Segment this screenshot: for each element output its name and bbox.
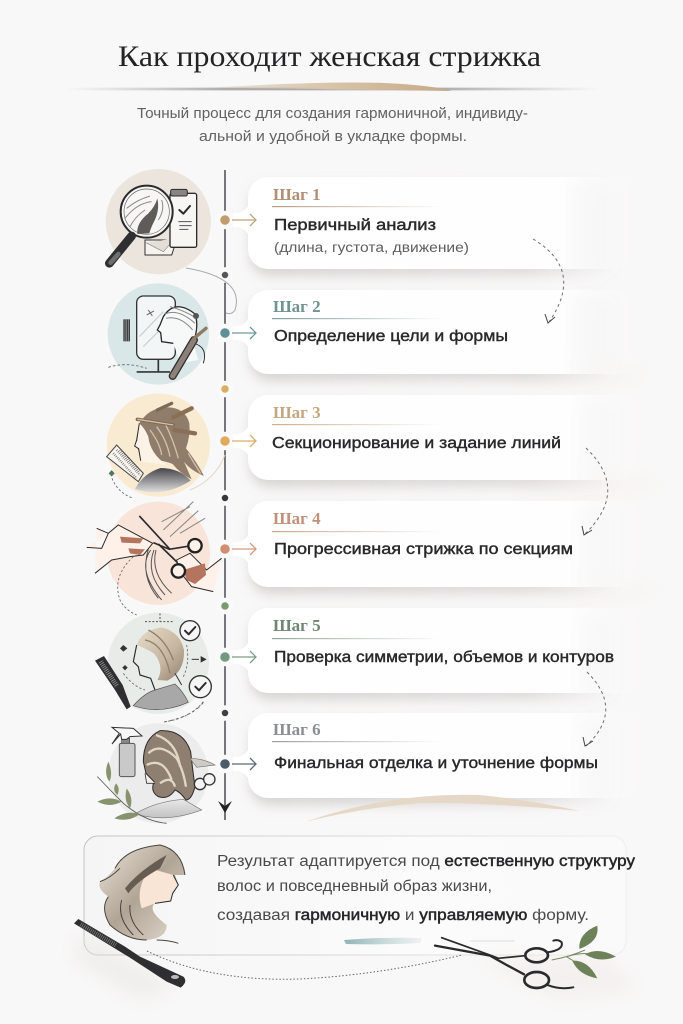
card 4: Прогрессивная стрижка по секциям	[274, 541, 573, 558]
card 3: Секционирование и задание линий	[272, 435, 561, 452]
card 3	[229, 395, 648, 480]
dashed connector arrows	[164, 239, 608, 746]
result text: Результат адаптируется под естественную структуру	[217, 853, 635, 870]
card 5: Проверка симметрии, объемов и контуров	[274, 649, 614, 666]
card 2: Шаг 2	[273, 297, 321, 316]
icon: woman with flowing hair	[99, 845, 185, 943]
subtitle: альной и удобной в укладке формы.	[199, 128, 467, 145]
icon: mirror and profile	[108, 283, 209, 385]
result text: волос и повседневный образ жизни,	[217, 878, 492, 895]
result text: создавая гармоничную и управляемую форму.	[217, 907, 589, 924]
icon: comb	[74, 919, 185, 988]
card 1	[229, 177, 640, 269]
card 2	[229, 290, 640, 374]
timeline axis	[218, 170, 232, 820]
decorative brush above result	[305, 795, 580, 822]
teal brush accent	[344, 938, 422, 944]
soft background smudges	[510, 369, 660, 596]
dotted path	[147, 951, 462, 979]
card 4	[229, 501, 648, 587]
card 5: Шаг 5	[273, 616, 321, 635]
icon: scissors	[435, 938, 573, 988]
icon: hands with scissors	[87, 502, 222, 615]
timeline nodes and arrows	[218, 213, 256, 771]
thin curved accents	[186, 268, 236, 490]
icon: sectioned hair	[107, 393, 210, 498]
icon: final styling with spray	[97, 723, 215, 823]
title underline brush	[65, 83, 600, 91]
card 5	[229, 608, 648, 693]
subtitle	[137, 105, 528, 145]
card shadows	[250, 184, 620, 805]
card 6: Финальная отделка и уточнение формы	[274, 755, 598, 772]
icon: magnifier and checklist	[106, 169, 211, 274]
card 3: Шаг 3	[273, 403, 321, 422]
card 4: Шаг 4	[273, 509, 321, 528]
icon: leaves	[552, 926, 616, 978]
subtitle: Точный процесс для создания гармоничной, индивиду-	[137, 105, 528, 122]
card 6	[229, 713, 648, 798]
card 2: Определение цели и формы	[274, 328, 508, 345]
result text	[217, 853, 635, 924]
title: Как проходит женская стрижка	[118, 40, 541, 73]
card 1: Шаг 1	[273, 185, 321, 204]
soft shadows under tools	[75, 935, 640, 1000]
icon: symmetry check	[95, 613, 211, 722]
card 1: (длина, густота, движение)	[274, 240, 469, 255]
card 6: Шаг 6	[273, 720, 321, 739]
result panel	[84, 836, 635, 955]
card 1: Первичный анализ	[274, 217, 436, 234]
